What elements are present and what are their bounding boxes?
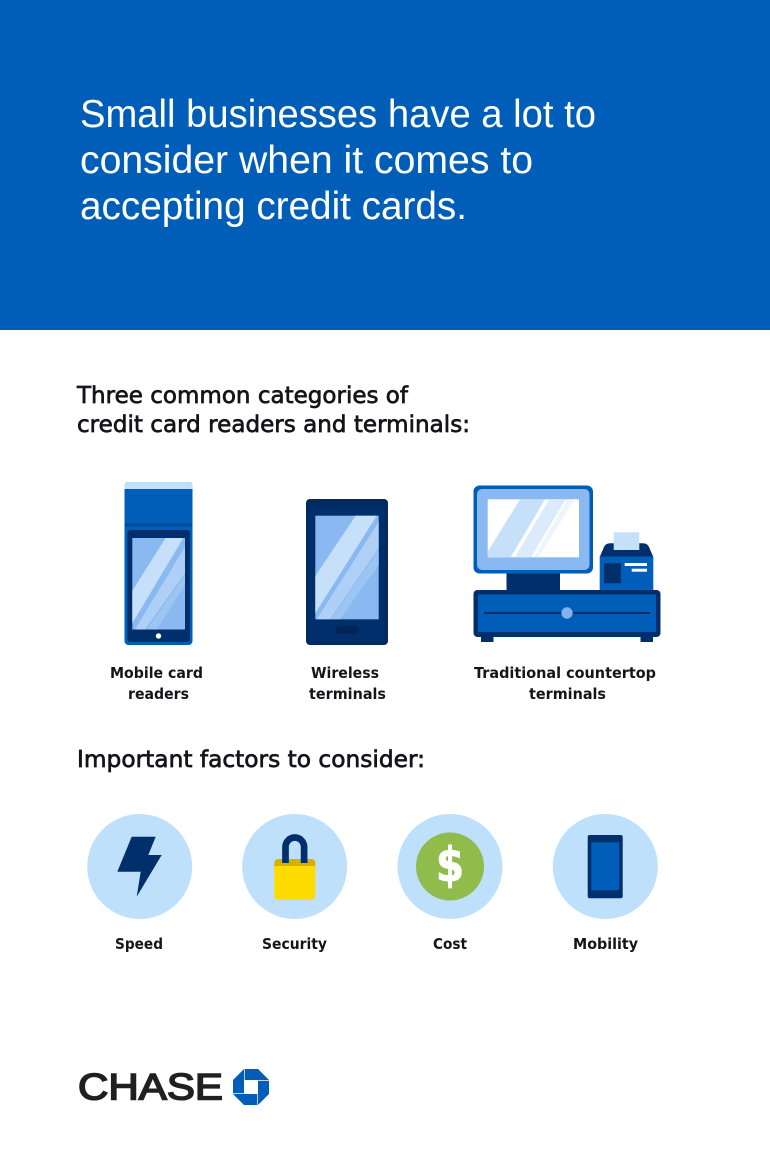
- label: traditional countertop terminals: [474, 664, 656, 703]
- title: consider when it comes to: [80, 139, 533, 182]
- logo: Chase: [78, 1066, 269, 1108]
- label: speed: Speed: [115, 935, 163, 953]
- icon: wireless terminal: [306, 499, 388, 645]
- label: mobile card readers: readers: [128, 685, 189, 703]
- label: traditional countertop terminals: terminals: [529, 685, 606, 703]
- label: cost: Cost: [433, 935, 468, 953]
- label: mobility: Mobility: [573, 935, 638, 953]
- icon: cost: [398, 814, 502, 919]
- label: mobile card readers: [110, 664, 203, 703]
- heading: categories: credit card readers and terminals:: [77, 410, 470, 438]
- monitor stand: [506, 572, 560, 591]
- title: Small businesses have a lot to: [80, 93, 596, 136]
- label: traditional countertop terminals: Traditional countertop: [474, 664, 656, 682]
- icon: cost: $: [436, 838, 464, 893]
- title: accepting credit cards.: [80, 185, 467, 228]
- label: security: Security: [262, 935, 327, 953]
- heading: categories: [76, 381, 470, 438]
- heading: factors: Important factors to consider:: [77, 745, 425, 773]
- icon: traditional countertop terminal: [474, 486, 660, 642]
- monitor: [474, 486, 593, 574]
- receipt printer: [600, 532, 653, 590]
- heading: categories: Three common categories of: [76, 381, 409, 409]
- icon: security: [242, 814, 347, 919]
- label: wireless terminals: [309, 664, 386, 703]
- header banner: [0, 0, 770, 330]
- label: mobile card readers: Mobile card: [110, 664, 203, 682]
- icon: mobile card reader: [124, 482, 192, 645]
- icon: mobility: [553, 814, 658, 919]
- wordmark: CHASE: [78, 1066, 223, 1108]
- octagon symbol: [233, 1069, 269, 1105]
- label: wireless terminals: Wireless: [311, 664, 379, 682]
- cash drawer: [474, 590, 660, 642]
- title: [80, 93, 596, 228]
- icon: speed: [87, 814, 192, 919]
- label: wireless terminals: terminals: [309, 685, 386, 703]
